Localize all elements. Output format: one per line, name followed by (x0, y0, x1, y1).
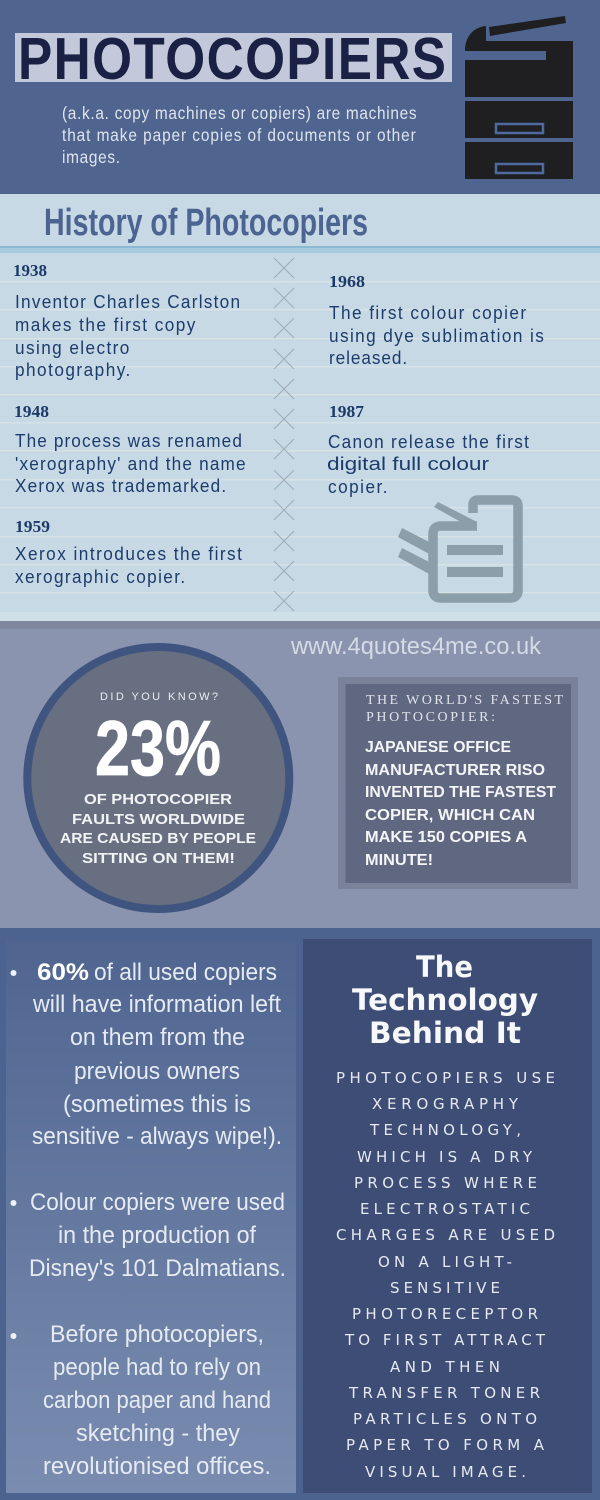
technology text: PROCESS WHERE (354, 1174, 537, 1192)
technology text: ON A LIGHT- (378, 1253, 512, 1271)
event: 1938: Inventor Charles Carlston (15, 291, 240, 312)
fastest copier box: THE WORLD'S FASTEST (366, 693, 563, 708)
fact: used copiers: (sometimes this is (63, 1091, 251, 1118)
fact: used copiers: sensitive - always wipe!). (32, 1123, 282, 1150)
event: 1968 (329, 272, 544, 368)
stat circle: DID YOU KNOW? (100, 691, 218, 703)
technology text: TRANSFER TONER (348, 1384, 540, 1402)
event: 1968: using dye sublimation is (329, 325, 544, 346)
event: 1987: digital full colour (327, 454, 489, 474)
fact: used copiers (10, 959, 282, 1150)
event: 1968: The first colour copier (329, 302, 526, 323)
panel: bottom section (0, 928, 600, 1500)
technology text: TO FIRST ATTRACT (344, 1331, 546, 1349)
timeline crosses (274, 258, 294, 611)
fact: carbon paper: Before photocopiers, (50, 1321, 264, 1348)
technology text: PAPER TO FORM A (346, 1436, 545, 1454)
fastest copier box (338, 677, 578, 889)
heading: technology: Technology (352, 983, 538, 1017)
event: 1987: copier. (328, 476, 388, 497)
heading: technology (352, 950, 538, 1050)
fastest copier box: JAPANESE OFFICE (365, 739, 511, 756)
technology text: PARTICLES ONTO (353, 1410, 537, 1428)
technology text: TECHNOLOGY, (369, 1121, 521, 1139)
fact: Disney (10, 1189, 286, 1282)
stat circle: SITTING ON THEM! (82, 850, 235, 867)
fastest copier box: MINUTE! (365, 852, 433, 869)
intro text: that make paper copies of documents or other (62, 126, 416, 145)
fact: used copiers: previous owners (74, 1058, 240, 1085)
panel: history (0, 194, 600, 621)
heading: technology: The (416, 950, 473, 984)
fact: carbon paper: carbon paper and hand (43, 1387, 271, 1414)
event: 1938: photography. (15, 359, 130, 380)
event: 1968: released. (329, 347, 407, 368)
fact: carbon paper: people had to rely on (53, 1354, 261, 1381)
technology text: VISUAL IMAGE. (365, 1463, 526, 1481)
icon: copier outline (398, 500, 518, 598)
event: 1948: The process was renamed (15, 430, 242, 451)
technology text: WHICH IS A DRY (357, 1148, 533, 1166)
technology text: SENSITIVE (390, 1279, 500, 1297)
technology text (336, 1069, 555, 1481)
heading: technology: Behind It (369, 1016, 521, 1050)
website url: www.4quotes4me.co.uk (290, 633, 542, 660)
fact: carbon paper: sketching - they (76, 1420, 240, 1447)
stat circle: OF PHOTOCOPIER (84, 791, 232, 808)
fastest copier box: COPIER, WHICH CAN (365, 807, 535, 824)
technology text: AND THEN (390, 1358, 500, 1376)
panel: technology (303, 939, 592, 1493)
technology text: ELECTROSTATIC (360, 1200, 530, 1218)
event: 1968: 1968 (329, 272, 365, 291)
event: 1948 (14, 402, 246, 496)
intro text: images. (62, 148, 120, 167)
event: 1938 (13, 261, 240, 380)
event: 1959 (15, 517, 242, 587)
fact: Disney: Colour copiers were used (30, 1189, 285, 1216)
fact: used copiers: of all used copiers (94, 959, 277, 986)
technology text: CHARGES ARE USED (336, 1226, 555, 1244)
stat circle: FAULTS WORLDWIDE (72, 811, 245, 828)
panel: did you know (0, 621, 600, 928)
technology text: PHOTORECEPTOR (352, 1305, 538, 1323)
fact: Disney: Disney's 101 Dalmatians. (29, 1255, 286, 1282)
event: 1938: 1938 (13, 261, 47, 280)
event: 1987 (327, 402, 529, 497)
fastest copier box: MANUFACTURER RISO (365, 762, 545, 779)
intro text (62, 104, 417, 167)
stat circle (27, 647, 289, 909)
fact: carbon paper: revolutionised offices. (43, 1453, 271, 1480)
event: 1948: 'xerography' and the name (15, 453, 246, 474)
fact: used copiers: on them from the (70, 1024, 245, 1051)
fact: carbon paper (10, 1321, 271, 1480)
fact: used copiers: will have information left (32, 991, 281, 1018)
fastest copier box: INVENTED THE FASTEST (365, 784, 556, 801)
event: 1987: Canon release the first (328, 431, 529, 452)
panel: facts list (6, 939, 296, 1493)
stat circle: ARE CAUSED BY PEOPLE (60, 830, 256, 847)
fastest copier box: MAKE 150 COPIES A (365, 829, 527, 846)
title: PHOTOCOPIERS (18, 26, 446, 92)
technology text: XEROGRAPHY (372, 1095, 519, 1113)
fact: used copiers: 60% (37, 959, 89, 986)
event: 1959: 1959 (15, 517, 50, 536)
event: 1959: Xerox introduces the first (15, 543, 242, 564)
event: 1959: xerographic copier. (15, 566, 185, 587)
event: 1948: 1948 (14, 402, 49, 421)
fastest copier box: PHOTOCOPIER: (366, 710, 495, 725)
event: 1987: 1987 (329, 402, 365, 421)
event: 1938: makes the first copy (15, 314, 195, 335)
fact: Disney: in the production of (58, 1222, 256, 1249)
event: 1938: using electro (15, 337, 129, 358)
panel: header (0, 0, 600, 194)
event: 1948: Xerox was trademarked. (15, 475, 226, 496)
stat circle: 23% (95, 704, 221, 792)
intro text: (a.k.a. copy machines or copiers) are machines (62, 104, 417, 123)
icon: photocopier (465, 16, 573, 179)
heading: history: History of Photocopiers (44, 202, 368, 244)
technology text: PHOTOCOPIERS USE (336, 1069, 555, 1087)
